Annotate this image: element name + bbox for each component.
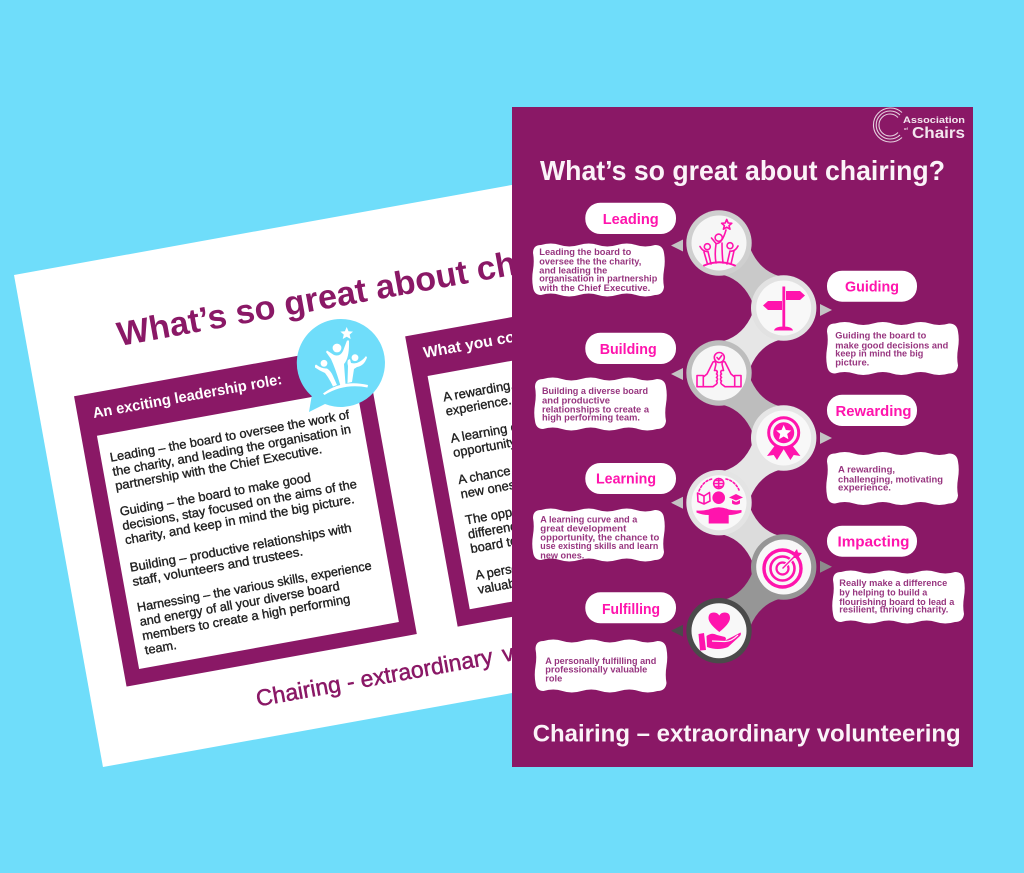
label pill: Fulfilling — [602, 601, 660, 618]
panel frame — [405, 284, 748, 627]
description box — [532, 244, 665, 296]
description box: A rewarding, — [838, 465, 895, 476]
description box — [535, 640, 667, 692]
logo text: of — [904, 126, 908, 131]
description box: by helping to build a — [839, 588, 928, 599]
text block: leadership role list: team. — [144, 638, 178, 657]
poster footer: Chairing – extraordinary volunteering — [533, 721, 961, 748]
node circle — [686, 340, 752, 406]
description box: professionally valuable — [545, 664, 647, 675]
text block: gains list — [442, 347, 714, 597]
node circle — [751, 534, 816, 600]
step: Guiding — [751, 271, 959, 375]
logo text: Chairs — [912, 125, 965, 142]
panel heading: An exciting leadership role: — [91, 371, 283, 422]
label pill — [585, 203, 676, 234]
description box — [534, 378, 667, 430]
step: Leading — [532, 203, 752, 296]
text block: gains list: opportunity. — [452, 433, 520, 460]
text block: leadership role list: Harnessing – the various skills, experience — [136, 559, 373, 615]
panel heading: What you could gain: — [422, 317, 580, 362]
description box: relationships to create a — [542, 404, 650, 415]
description box: opportunity, the chance to — [540, 533, 659, 544]
text block: leadership role list: Leading – the board to oversee the work of — [109, 408, 351, 465]
description box: with the Chief Executive. — [538, 283, 650, 294]
description box: flourishing board to lead a — [839, 597, 955, 608]
description box: make good decisions and — [835, 340, 948, 351]
logo text: Association — [903, 115, 965, 125]
label pill: Leading — [603, 211, 659, 228]
panel: what you could gain — [405, 284, 748, 627]
text block: gains list: experience. — [444, 392, 513, 419]
icon: target with arrow — [764, 549, 802, 587]
text block: gains list: difference by helping to build a flourishing — [467, 485, 702, 542]
panel frame — [74, 344, 417, 687]
node circle — [686, 470, 752, 535]
text block: leadership role list: decisions, stay focused on the aims of the — [121, 477, 358, 533]
description box: Really make a difference — [839, 578, 947, 589]
step: Building — [534, 333, 752, 430]
description box: high performing team. — [542, 413, 640, 424]
text block: gains list: The opportunity to really make a — [464, 480, 649, 527]
label pill: Guiding — [845, 279, 899, 296]
description box: great development — [540, 524, 627, 535]
poster background — [512, 107, 973, 767]
label pill — [827, 526, 917, 557]
step: Impacting — [751, 526, 965, 624]
text block: leadership role list: members to create a high performing — [141, 592, 351, 643]
step: Fulfilling — [535, 592, 752, 692]
label pill — [827, 271, 917, 302]
text block: gains list: A chance to use existing skills and learn — [457, 432, 684, 487]
label pill — [827, 395, 917, 426]
description box: role — [545, 674, 562, 685]
description box: A learning curve and a — [540, 514, 638, 525]
description box — [826, 322, 959, 375]
logo rings — [873, 108, 902, 142]
text block: leadership role list: the charity, and leading the organisation in — [111, 422, 352, 479]
step: Rewarding — [751, 395, 959, 505]
sheet footer: Chairing - extraordinary — [254, 643, 495, 711]
arrow — [671, 240, 683, 252]
description box: experience. — [838, 483, 891, 494]
description box: Guiding the board to — [835, 330, 926, 341]
description box: keep in mind the big — [835, 349, 923, 360]
node circle — [751, 405, 816, 471]
description box: Leading the board to — [539, 247, 631, 258]
timeline connectors — [724, 248, 779, 627]
node circle — [686, 598, 752, 663]
description box: A personally fulfilling and — [545, 656, 656, 667]
icon: two thumbs up with tick — [697, 352, 741, 387]
label pill — [585, 592, 676, 623]
logo: Association of Chairs — [873, 108, 965, 142]
label pill — [585, 463, 676, 494]
text block: leadership role list: staff, volunteers and trustees. — [131, 544, 304, 589]
label pill — [585, 333, 676, 364]
arrow — [671, 497, 683, 509]
sheet title: What’s so great about ch — [114, 245, 519, 354]
icon: rosette with star — [767, 418, 800, 460]
icon: signpost — [763, 286, 805, 330]
text block: gains list: A learning curve and a great development — [449, 389, 687, 446]
panel: purple poster — [512, 107, 973, 767]
icon: heart in open hand — [698, 612, 741, 650]
arrow — [820, 432, 832, 444]
text block: gains list: valuable role. — [477, 568, 555, 597]
logo text — [903, 115, 965, 142]
icon: blue speech bubble with people — [297, 319, 385, 412]
description box: challenging, motivating — [838, 474, 943, 485]
text block: leadership role list: partnership with the Chief Executive. — [114, 442, 323, 493]
description box — [532, 508, 665, 562]
label pill: Rewarding — [836, 403, 912, 420]
poster title: What’s so great about chairing? — [540, 155, 945, 186]
description box: use existing skills and learn — [540, 541, 658, 552]
label pill: Impacting — [838, 534, 910, 551]
node circle — [751, 275, 816, 341]
step: Learning — [532, 463, 752, 562]
arrow — [820, 304, 832, 316]
text block: leadership role list — [109, 408, 386, 657]
label pill: Building — [600, 341, 657, 358]
text block: leadership role list: Guiding – the board to make good — [119, 471, 312, 519]
description box: picture. — [835, 358, 869, 369]
text block: gains list: board to lead a resilient, thriving charity. — [469, 501, 695, 556]
sheet footer: volunteering — [500, 619, 628, 667]
description box: resilient, thriving charity. — [839, 605, 948, 616]
description box — [832, 570, 965, 624]
description box: organisation in partnership — [539, 274, 657, 285]
text block: leadership role list: charity, and keep in mind the big picture. — [124, 492, 356, 547]
description box: oversee the the charity, — [539, 256, 641, 267]
node circle — [686, 210, 752, 276]
text block: gains list: A rewarding, challenging, motivating — [442, 353, 647, 404]
people figures — [315, 340, 368, 395]
arrow — [820, 561, 832, 573]
description box: Building a diverse board — [542, 386, 648, 397]
description box: new ones. — [540, 550, 584, 561]
text block: gains list: new ones. — [459, 476, 520, 501]
text block: leadership role list: and energy of all your diverse board — [139, 579, 341, 629]
icon: person juggling book, globe and cap — [696, 478, 743, 524]
icon: people reaching for star — [700, 220, 738, 266]
panel: exciting leadership role — [74, 344, 417, 687]
description box: and leading the — [539, 265, 607, 276]
bubble shape — [297, 319, 385, 412]
sheet background — [14, 149, 799, 767]
arrow — [671, 625, 683, 637]
panel: tilted white sheet — [14, 149, 799, 767]
star — [340, 327, 353, 339]
arrow — [671, 368, 683, 380]
label pill: Learning — [596, 470, 656, 487]
description box — [826, 452, 959, 505]
text block: gains list: A personally fulfilling and professionally — [474, 528, 698, 583]
description box: and productive — [542, 395, 610, 406]
text block: leadership role list: Building – productive relationships with — [129, 521, 353, 575]
